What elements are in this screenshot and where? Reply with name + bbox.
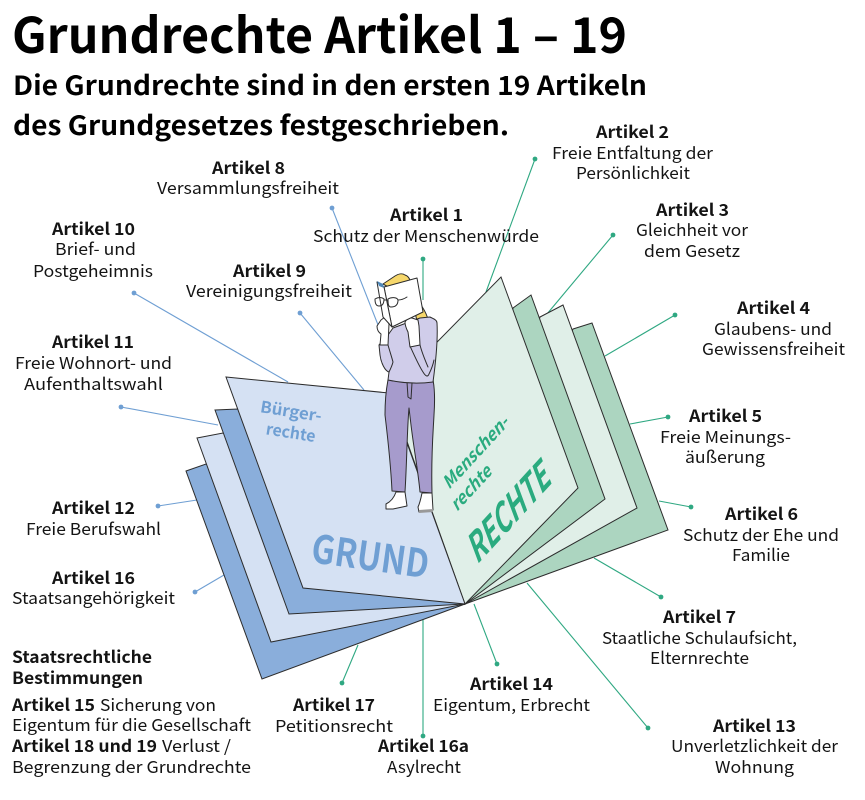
label: Artikel 3: Artikel 3 [655, 197, 729, 221]
connector: Artikel 3 [547, 233, 615, 314]
label: Artikel 7: Artikel 7 [662, 604, 736, 628]
label: Artikel 9: Vereinigungsfreiheit [186, 278, 352, 302]
label: Artikel 12: Freie Berufswahl [26, 516, 161, 540]
label: Artikel 16: Staatsangehörigkeit [12, 585, 175, 609]
connector: Artikel 4 [605, 313, 677, 356]
label: Artikel 7 [602, 604, 797, 669]
connector: Artikel 12 [156, 500, 197, 508]
label: Artikel 7: Staatliche Schulaufsicht, [602, 625, 797, 649]
label: Artikel 10 [33, 216, 153, 282]
label: Artikel 12 [26, 495, 161, 540]
connector: Artikel 7 [594, 558, 663, 599]
label: Artikel 3: Gleichheit vor [636, 217, 749, 241]
label: Artikel 16a: Artikel 16a [377, 733, 469, 757]
label: Artikel 5: Artikel 5 [688, 403, 762, 427]
connector: Artikel 8 [330, 206, 382, 335]
label: Artikel 16: Artikel 16 [51, 565, 135, 589]
page: Menschenrechte [389, 277, 578, 604]
label: Artikel 7: Elternrechte [650, 645, 749, 669]
label: Artikel 16a [377, 733, 469, 778]
figure: woman reading a book [375, 274, 437, 513]
open book [186, 277, 668, 679]
label: Artikel 17: Petitionsrecht [275, 713, 393, 737]
text block: Staatsrechtliche Bestimmungen [11, 644, 251, 778]
label: Artikel 13: Artikel 13 [712, 713, 796, 737]
page label: Menschenrechte: rechte [448, 456, 496, 517]
label: Artikel 13: Wohnung [715, 754, 795, 778]
page label: Bürgerrechte [256, 393, 324, 447]
label: Artikel 9: Artikel 9 [232, 258, 306, 282]
connector: Artikel 6 [659, 501, 693, 509]
connector: Artikel 11 [119, 405, 218, 425]
text block: Staatsrechtliche Bestimmungen: Verlust / [162, 733, 232, 757]
connector: Artikel 17 [340, 645, 358, 685]
label: Artikel 1: Artikel 1 [389, 202, 463, 226]
subtitle: des Grundgesetzes festgeschrieben. [13, 104, 509, 143]
text block: Staatsrechtliche Bestimmungen: Sicherung von [100, 692, 216, 716]
subtitle: Die Grundrechte sind in den ersten 19 Artikeln [13, 64, 647, 103]
label: Artikel 12: Artikel 12 [51, 495, 135, 519]
connector: Artikel 14 [474, 604, 499, 666]
label: Artikel 2: Persönlichkeit [576, 160, 690, 184]
label: Artikel 11 [15, 329, 172, 395]
label: Artikel 14: Artikel 14 [469, 671, 553, 695]
label: Artikel 5 [660, 403, 791, 468]
label: Artikel 1: Schutz der Menschenwürde [313, 223, 539, 247]
label: Artikel 6: Familie [732, 542, 790, 566]
text block: Staatsrechtliche Bestimmungen: Artikel 18 und 19 [11, 733, 157, 757]
right pages [465, 323, 668, 604]
page label: Bürgerrechte: rechte [264, 415, 318, 447]
label: Artikel 5: Freie Meinungs- [660, 424, 791, 448]
label: Artikel 10: Postgeheimnis [33, 258, 153, 282]
sweater [379, 317, 437, 383]
label: Artikel 14 [433, 671, 590, 716]
page: Bürgerrechte [226, 377, 465, 604]
label: Artikel 10: Artikel 10 [51, 216, 135, 240]
subtitle [13, 64, 647, 143]
label: Artikel 8 [157, 155, 339, 199]
label: Artikel 10: Brief- und [55, 236, 136, 260]
label: Artikel 2: Freie Entfaltung der [552, 140, 714, 164]
text block: Staatsrechtliche Bestimmungen: Staatsrechtliche [12, 644, 152, 668]
label: Artikel 13: Unverletzlichkeit der [671, 733, 839, 757]
label: Artikel 1 [313, 202, 539, 247]
label: Artikel 17 [275, 692, 393, 737]
page word: RECHTE: RECHTE [461, 440, 557, 576]
label: Artikel 14: Eigentum, Erbrecht [433, 692, 590, 716]
connector: Artikel 1 [421, 257, 425, 300]
label: Artikel 3: dem Gesetz [644, 238, 740, 262]
connector: Artikel 16 [193, 575, 224, 594]
connector: Artikel 5 [630, 415, 670, 424]
label: Artikel 4: Artikel 4 [736, 295, 810, 319]
label: Artikel 11: Aufenthaltswahl [24, 371, 163, 395]
shoes [386, 492, 407, 509]
label: Artikel 6: Schutz der Ehe und [683, 522, 839, 546]
label: Artikel 4: Glaubens- und [714, 316, 832, 340]
connector: Artikel 10 [132, 291, 288, 382]
text block: Staatsrechtliche Bestimmungen: Artikel 15 [11, 692, 95, 716]
glasses [375, 297, 407, 307]
label: Artikel 2: Artikel 2 [595, 119, 669, 143]
label: Artikel 11: Artikel 11 [51, 329, 134, 353]
label: Artikel 6: Artikel 6 [724, 501, 798, 525]
label: Artikel 2 [552, 119, 714, 184]
label: Artikel 8: Versammlungsfreiheit [157, 175, 339, 199]
label: Artikel 16 [12, 565, 175, 609]
text block: Staatsrechtliche Bestimmungen: Eigentum für die Gesellschaft [12, 712, 251, 736]
label: Artikel 8: Artikel 8 [211, 155, 285, 179]
label: Artikel 16a: Asylrecht [387, 754, 461, 778]
page label: Bürgerrechte: Bürger- [259, 393, 324, 427]
page word: GRUND: GRUND [308, 518, 433, 590]
label: Artikel 6 [683, 501, 839, 566]
label: Artikel 9 [186, 258, 352, 302]
connector: Artikel 16a [421, 610, 425, 738]
left pages [186, 464, 465, 679]
hair [383, 274, 428, 330]
jeans [385, 380, 435, 493]
label: Artikel 4 [702, 295, 845, 360]
hands [377, 317, 389, 345]
text block: Staatsrechtliche Bestimmungen: Bestimmungen [12, 665, 143, 689]
label: Artikel 11: Freie Wohnort- und [15, 350, 172, 374]
connector: Artikel 2 [486, 157, 537, 292]
connector: Artikel 9 [298, 311, 364, 390]
label: Artikel 4: Gewissensfreiheit [702, 336, 845, 360]
label: Artikel 13 [671, 713, 839, 778]
label: Artikel 5: äußerung [685, 444, 766, 468]
label: Artikel 3 [636, 197, 749, 262]
text block: Staatsrechtliche Bestimmungen: Begrenzung der Grundrechte [12, 754, 251, 778]
page label: Menschenrechte: Menschen- [440, 406, 513, 495]
label: Artikel 17: Artikel 17 [292, 692, 375, 716]
connector: Artikel 13 [527, 583, 650, 730]
book held by figure [384, 278, 423, 327]
